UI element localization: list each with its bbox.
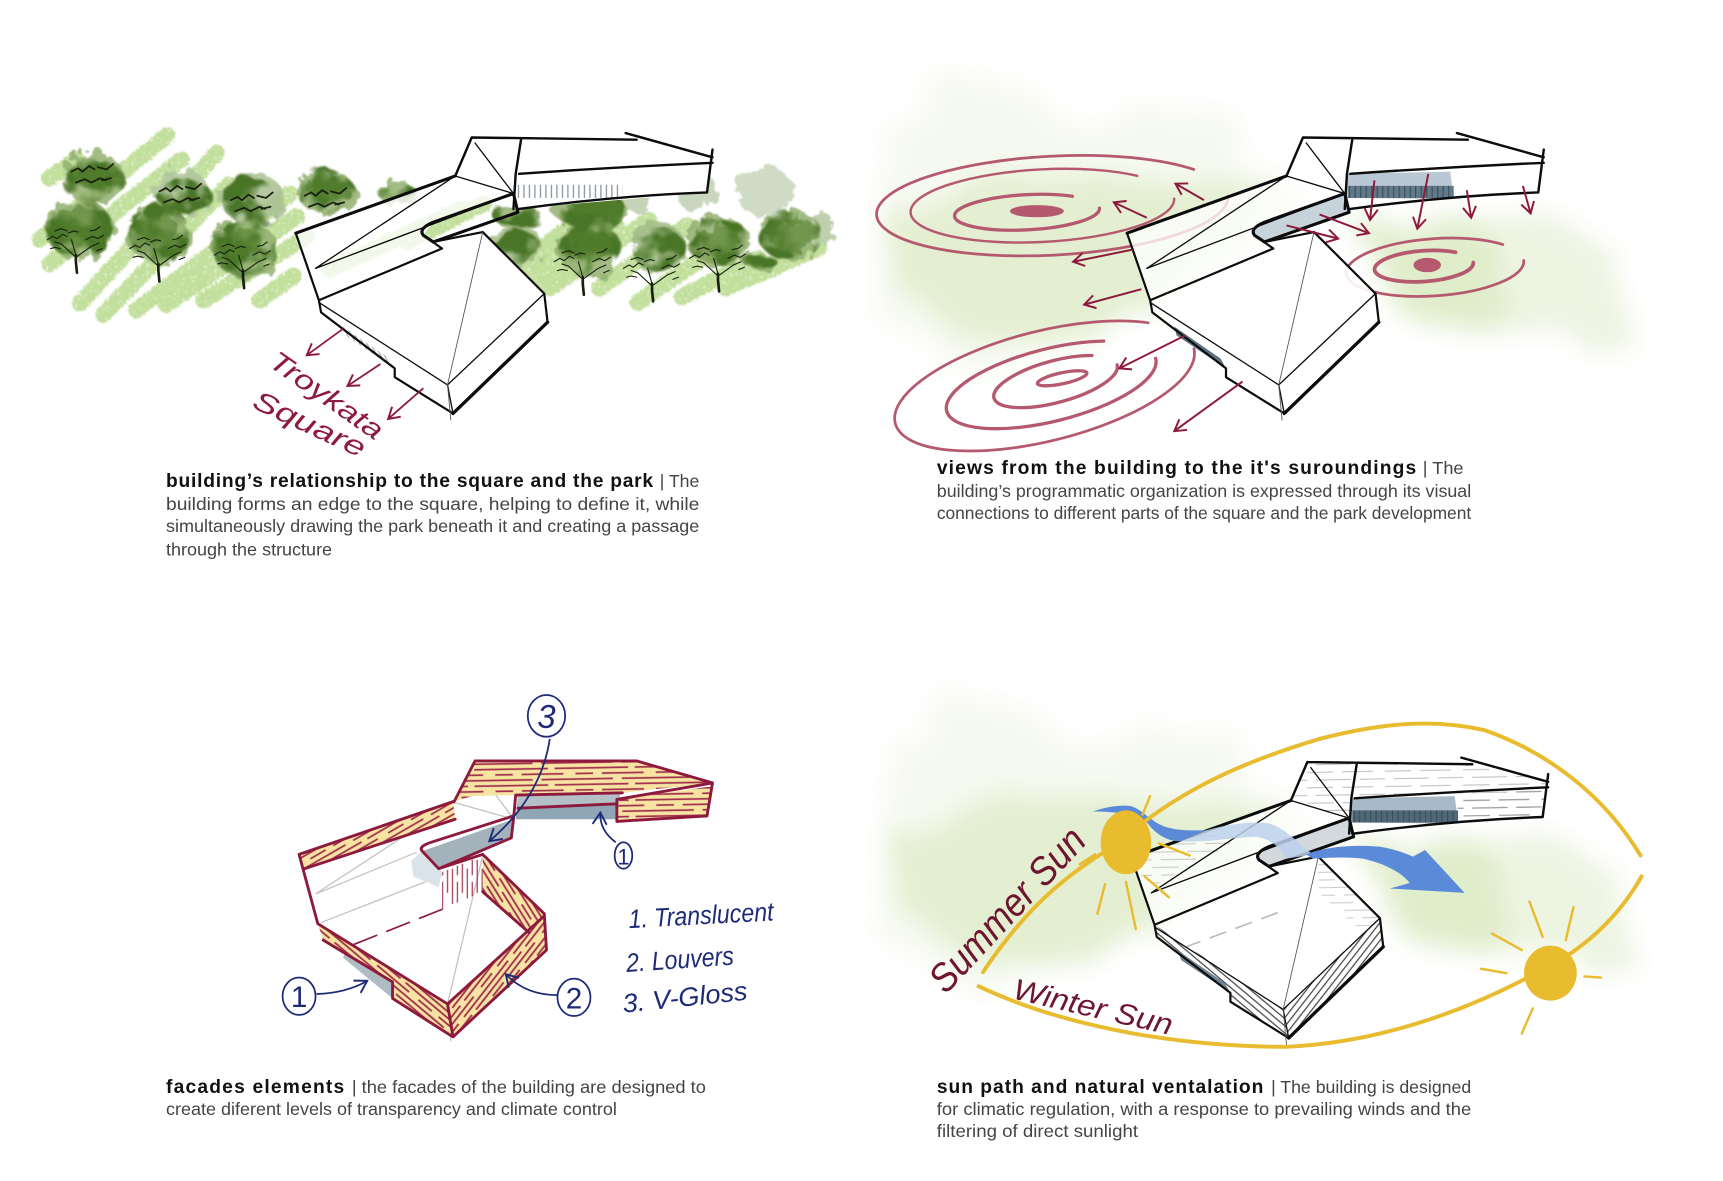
glazed passage [1253, 194, 1349, 242]
solid dark cores [57, 163, 820, 260]
trees row [45, 153, 833, 301]
caption: facades [166, 1077, 706, 1119]
view target spirals [874, 147, 1526, 477]
panel: building relationship to square and park [40, 133, 833, 559]
louver strip under the bridge [517, 185, 622, 198]
legend: 1. Translucent [628, 896, 776, 934]
caption: sun path [937, 1077, 1471, 1141]
arrows toward the square [307, 329, 423, 419]
facade hatching [1291, 762, 1548, 818]
handwritten labels [920, 818, 1176, 1042]
pale translucent volume [411, 851, 442, 887]
green wash background [882, 687, 1641, 984]
callout 3: 3 [537, 698, 556, 735]
legend: 3. V-Gloss [621, 976, 749, 1019]
callout 1 left [283, 978, 367, 1015]
caption: sun path: sun path and natural ventalation [937, 1077, 1263, 1098]
legend [621, 896, 776, 1019]
callout 1 right [600, 813, 632, 869]
legend: 2. Louvers [624, 941, 735, 978]
louvre facade bands [299, 761, 713, 1037]
thin grey roof lines [316, 766, 513, 1041]
caption: views [937, 458, 1471, 523]
caption: building relationship [166, 471, 699, 559]
caption: facades: | the facades of the building are designed to [352, 1077, 706, 1097]
glazing [1347, 172, 1454, 199]
spiral upper left [874, 147, 1231, 264]
callout 2 [506, 974, 590, 1016]
tree canopies: pale underpainting [45, 153, 833, 277]
caption: sun path: | The building is designed [1271, 1077, 1471, 1097]
panel: sun path and natural ventilation [882, 687, 1642, 1141]
caption: building relationship: simultaneously drawing the park beneath it and creating a passage [166, 516, 699, 536]
caption: facades: facades elements [166, 1077, 344, 1098]
callout 1 right: 1 [617, 844, 630, 869]
sun paths [979, 724, 1642, 1047]
wind arrow [1093, 806, 1465, 893]
green wash background [880, 66, 1638, 363]
handwritten labels: Winter Sun [1010, 973, 1176, 1042]
caption: building relationship: building’s relationship to the square and the park [166, 471, 653, 492]
spiral lower left [882, 295, 1207, 477]
caption: sun path: filtering of direct sunlight [937, 1121, 1138, 1141]
panel: views from the building [874, 66, 1638, 523]
building sketch [1127, 133, 1544, 420]
entrance hatch [343, 327, 395, 368]
building sketch [1131, 758, 1548, 1045]
building sketch [296, 133, 713, 420]
summer sun [1080, 796, 1190, 929]
callout 3 [489, 695, 565, 841]
caption: building relationship: | The [660, 471, 699, 491]
caption: views: building’s programmatic organization is expressed through its visual [937, 481, 1471, 501]
spiral right [1344, 232, 1526, 302]
caption: building relationship: building forms an edge to the square, helping to define it, while [166, 494, 699, 514]
view arrows [1073, 174, 1531, 431]
red facade outlines [299, 761, 713, 1037]
callout 1 left: 1 [291, 981, 307, 1014]
glazing band [343, 794, 620, 998]
trunks and ink scribbles [47, 164, 745, 301]
caption: views: views from the building to the it's suroundings [937, 458, 1416, 479]
light green park strokes [40, 135, 819, 315]
caption: views: connections to different parts of the square and the park development [937, 503, 1471, 523]
winter sun [1481, 902, 1601, 1034]
caption: facades: create diferent levels of transparency and climate control [166, 1099, 617, 1119]
handwritten labels: Summer Sun [920, 818, 1095, 1001]
glazing [1351, 796, 1458, 824]
handwritten label: Troykata Square: Troykata [264, 345, 390, 446]
handwritten label: Troykata Square: Square [248, 384, 371, 463]
tree canopies: dark mottling [46, 159, 824, 276]
panel: facades elements [166, 695, 776, 1119]
caption: views: | The [1423, 458, 1464, 478]
callout 2: 2 [566, 982, 582, 1015]
handwritten label: Troykata Square [248, 345, 390, 463]
caption: building relationship: through the structure [166, 539, 332, 559]
caption: sun path: for climatic regulation, with a response to prevailing winds and the [937, 1099, 1471, 1119]
